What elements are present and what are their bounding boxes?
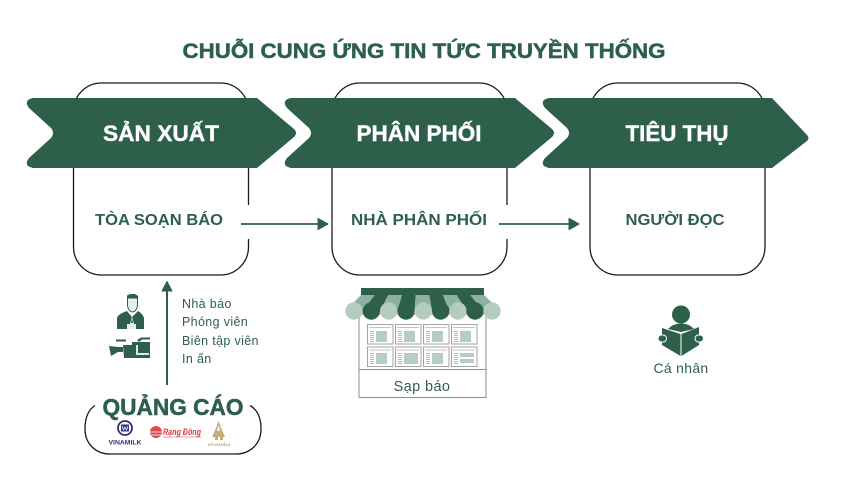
arrow: advertising up to newsroom [162, 282, 172, 385]
newspapers [368, 324, 477, 366]
icon: person reading [658, 306, 704, 356]
chevron: distribution [285, 98, 554, 168]
panel: advertising [85, 392, 261, 454]
heading: consumption: TIÊU THỤ [626, 121, 728, 146]
heading: distribution: PHÂN PHỐI [356, 120, 482, 146]
panel: distribution box [332, 83, 507, 275]
label: reader: NGƯỜI ĐỌC [626, 211, 724, 229]
stand frame [359, 314, 486, 398]
logo: Vinamilk [108, 421, 142, 446]
logo: Rang Dong: Rạng Đông [163, 427, 201, 437]
list: roles: Nhà báo [182, 297, 232, 311]
label: individual: Cá nhân [653, 360, 709, 376]
title: CHUỖI CUNG ỨNG TIN TỨC TRUYỀN THỐNG [182, 37, 666, 63]
icon: video camera [109, 338, 150, 358]
list: roles: Phóng viên [182, 315, 248, 329]
arrow: production to distribution [236, 205, 328, 239]
list: roles [182, 297, 259, 366]
logo: Rang Dong [150, 426, 201, 438]
heading: production: SẢN XUẤT [103, 121, 220, 146]
list: roles: Biên tập viên [182, 334, 259, 348]
panel: consumption box [590, 83, 765, 275]
logo: Vinataba: vinataba [208, 442, 231, 447]
chevron: consumption [543, 98, 808, 168]
icon: journalist [117, 294, 144, 329]
label: newsroom: TÒA SOẠN BÁO [95, 211, 223, 229]
chevron: production [27, 98, 296, 168]
list: roles: In ấn [182, 352, 212, 366]
heading: advertising: QUẢNG CÁO [102, 392, 244, 420]
logo: Vinataba [208, 421, 231, 447]
label: newsstand: Sạp báo [394, 379, 450, 395]
logo: Vinamilk: VINAMILK [108, 440, 142, 446]
panel: production box [74, 83, 248, 275]
awning [345, 288, 501, 320]
icon: newsstand [345, 288, 501, 398]
label: distributor: NHÀ PHÂN PHỐI [351, 211, 487, 229]
arrow: distribution to consumption [495, 205, 579, 239]
